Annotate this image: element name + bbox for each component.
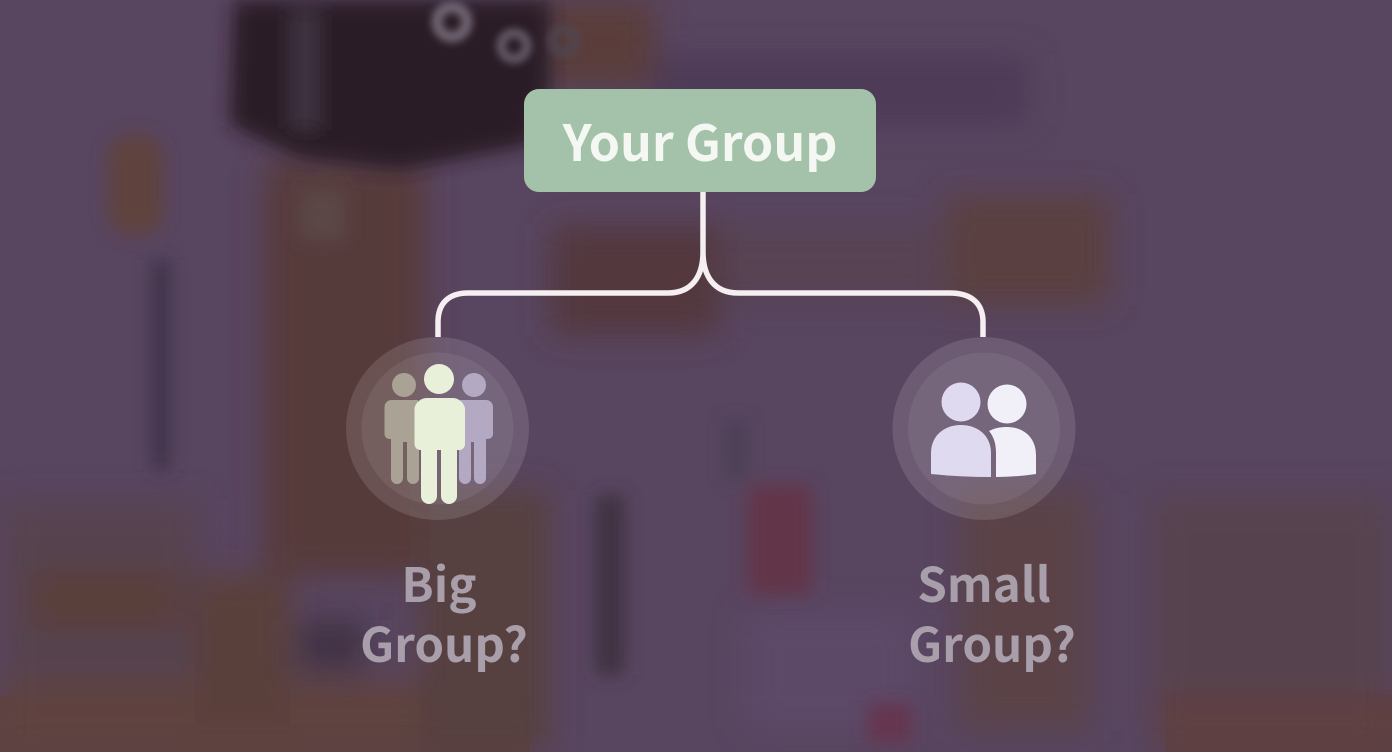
- label: Big Group?: Group?: [360, 607, 528, 676]
- label: Small Group?: [908, 547, 1076, 676]
- label: Big Group?: [360, 547, 528, 676]
- label: Big Group?: Big: [401, 547, 477, 616]
- top box: Your Group: [524, 89, 876, 192]
- label: Small Group?: Group?: [908, 607, 1076, 676]
- top box: Your Group: Your Group: [563, 104, 837, 176]
- label: Small Group?: Small: [917, 547, 1051, 616]
